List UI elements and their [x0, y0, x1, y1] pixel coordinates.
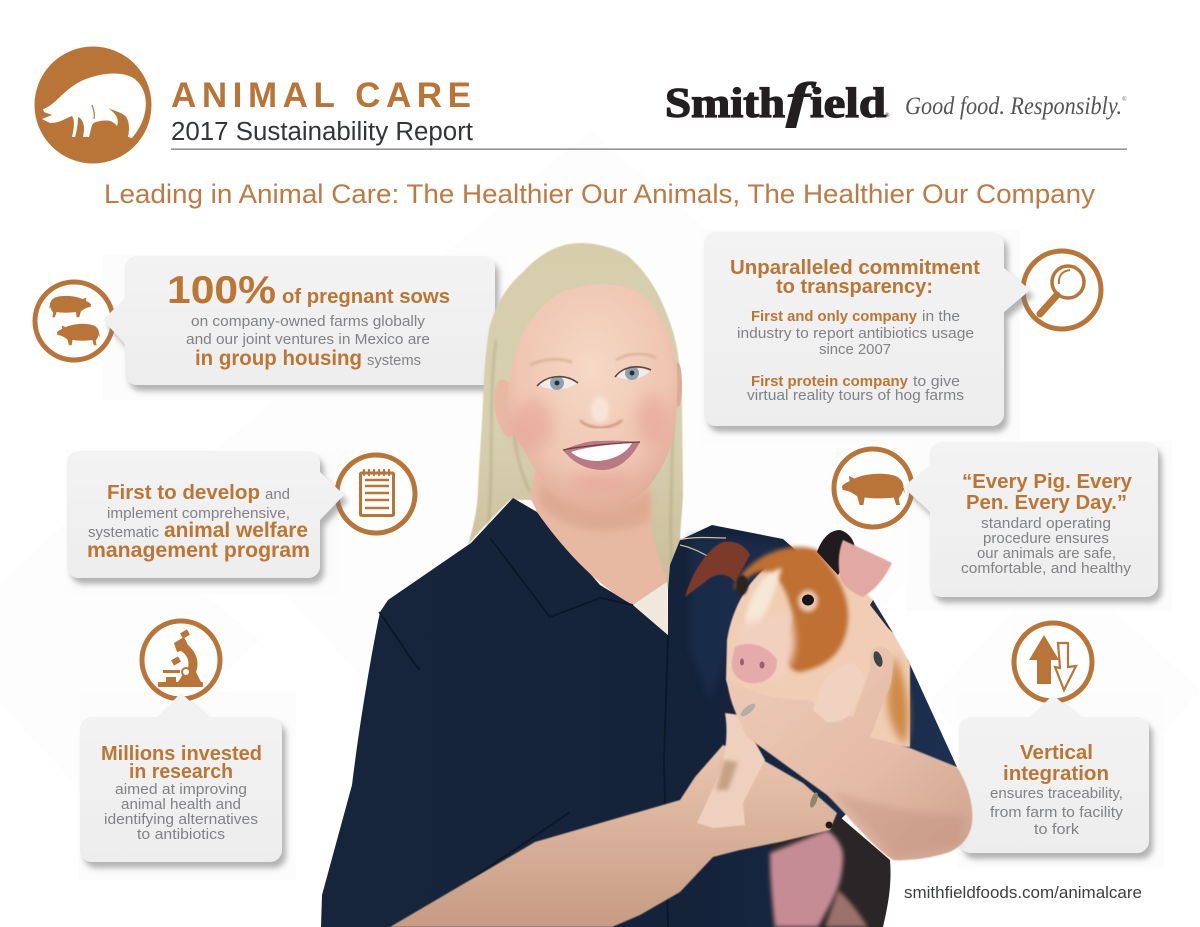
- bubble text: of pregnant sows: [282, 286, 450, 308]
- speech bubble: [103, 256, 495, 385]
- piglet belly and hind leg: [770, 830, 843, 927]
- bubble text: [990, 742, 1124, 838]
- speech bubble: [704, 232, 1030, 426]
- bubble text: from farm to facility: [990, 805, 1124, 821]
- bubble text: [87, 482, 310, 562]
- near forearm and hand: [727, 647, 972, 860]
- bubble text: integration: [1003, 763, 1109, 785]
- bubble text: identifying alternatives: [104, 812, 258, 828]
- icon: two pigs: [35, 282, 113, 360]
- piglet face pale area: [738, 610, 795, 682]
- bubble text: First and only company: [751, 309, 917, 325]
- bubble text: implement comprehensive,: [107, 506, 290, 522]
- bubble text: [730, 257, 980, 404]
- shirt right shoulder highlight: [690, 535, 780, 700]
- bubble text: industry to report antibiotics usage: [737, 326, 974, 342]
- piglet dark eye patch: [736, 575, 748, 595]
- speech bubble: [67, 451, 344, 578]
- bubble text: aimed at improving: [115, 782, 247, 798]
- undershirt: [633, 582, 668, 635]
- bubble text: since 2007: [819, 342, 891, 358]
- panel: welfare program: [67, 451, 415, 578]
- icon: microscope: [142, 621, 220, 699]
- nose: [580, 397, 622, 428]
- hair: [468, 243, 713, 622]
- panel: group housing: [35, 256, 495, 385]
- bubble text: in the: [922, 309, 960, 325]
- leg smudge: [716, 760, 738, 790]
- icon: magnifying glass: [1023, 251, 1101, 329]
- bubble text: Pen. Every Day.”: [966, 492, 1127, 514]
- neck shadow: [540, 480, 650, 531]
- hair strands over right shoulder: [678, 538, 726, 560]
- panel: every pig: [834, 442, 1158, 597]
- icon: up and down arrows: [1014, 623, 1092, 701]
- main heading: Leading in Animal Care: The Healthier Our Animals, The Healthier Our Company: [104, 179, 1096, 209]
- piglet head orange: [735, 547, 848, 672]
- bubble text: [961, 471, 1133, 577]
- piglet front leg: [697, 713, 765, 828]
- title: animal care: ANIMAL CARE: [171, 76, 471, 115]
- header: [34, 46, 1127, 164]
- bubble text: in research: [129, 761, 233, 783]
- panel: vertical integration: [959, 623, 1149, 853]
- bubble text: to give: [913, 374, 960, 390]
- bubble text: on company-owned farms globally: [191, 314, 426, 330]
- bubble text: First to develop: [107, 482, 260, 504]
- piglet snout: [732, 644, 777, 683]
- bubble text: comfortable, and healthy: [961, 561, 1132, 577]
- logo: Smithfield: Smith: [665, 81, 785, 127]
- eyes and brows: [530, 354, 656, 390]
- bubble text: animal welfare: [164, 519, 308, 542]
- logo tagline: Good food. Responsibly.: [905, 93, 1122, 120]
- subtitle: report name: 2017 Sustainability Report: [171, 118, 473, 146]
- bubble text: Unparalleled commitment: [730, 257, 980, 279]
- icon: pig: [834, 449, 912, 527]
- bubble text: to transparency:: [776, 276, 933, 298]
- smile: [563, 441, 640, 470]
- bubble text: and: [265, 487, 290, 503]
- header: ®: [1122, 96, 1127, 103]
- logo: Smithfield: [665, 72, 890, 128]
- bubble text: to fork: [1034, 822, 1080, 838]
- hair shading: [488, 340, 673, 570]
- forearm shading: [830, 790, 965, 858]
- bubble text: our animals are safe,: [977, 546, 1116, 562]
- speech bubble: [80, 693, 282, 862]
- bubble text: procedure ensures: [983, 531, 1109, 547]
- piglet right ear: [817, 530, 892, 597]
- piglet eye: [798, 590, 818, 612]
- panel: transparency: [704, 232, 1101, 426]
- piglet lower body: [768, 817, 891, 927]
- panel: research: [80, 621, 282, 862]
- website url: smithfieldfoods.com/animalcare: [904, 884, 1142, 902]
- bubble text: First protein company: [751, 374, 908, 390]
- speech bubble: [959, 695, 1149, 853]
- nails and rings: [739, 650, 884, 828]
- bubble text: Millions invested: [101, 743, 262, 765]
- bubble text: systematic: [88, 525, 159, 541]
- speech bubble: [903, 442, 1158, 597]
- shirt collar and creases: [379, 538, 668, 927]
- bubble text: systems: [367, 353, 421, 369]
- piglet trotter: [813, 663, 865, 722]
- bubble text: management program: [87, 539, 310, 562]
- bubble text: 100%: [167, 269, 276, 312]
- piglet haunch highlight: [825, 890, 868, 927]
- bubble text: Vertical: [1020, 742, 1093, 764]
- bubble text: and our joint ventures in Mexico are: [186, 332, 430, 348]
- icon: pig in filled circle: [34, 46, 152, 164]
- bubble text: virtual reality tours of hog farms: [747, 388, 964, 404]
- bubble text: to antibiotics: [137, 827, 225, 843]
- cheeks: [513, 394, 668, 491]
- bubble text: in group housing: [195, 347, 362, 370]
- photo: farmer holding piglet: [321, 243, 972, 927]
- logo: Smithfield: ield: [810, 81, 886, 127]
- bubble text: [167, 269, 450, 370]
- right ear: [674, 363, 682, 407]
- logo: Smithfield: ®: [885, 112, 890, 119]
- bubble text: ensures traceability,: [990, 786, 1123, 802]
- piglet left ear: [685, 542, 750, 597]
- bubble text: [101, 743, 262, 843]
- piglet dark patch on back: [870, 600, 893, 633]
- bubble text: animal health and: [121, 797, 241, 813]
- piglet body: [726, 550, 910, 747]
- left ear: [491, 378, 521, 438]
- shirt: [321, 498, 957, 927]
- icon: notepad: [337, 455, 415, 533]
- logo: Smithfield: f: [786, 72, 816, 128]
- piglet white blaze: [745, 568, 782, 640]
- face: [507, 284, 678, 510]
- bubble text: “Every Pig. Every: [962, 471, 1133, 493]
- bubble text: standard operating: [981, 516, 1111, 532]
- piglet body orange flank: [887, 655, 908, 745]
- neck: [530, 470, 667, 605]
- far forearm and hand: [390, 745, 837, 927]
